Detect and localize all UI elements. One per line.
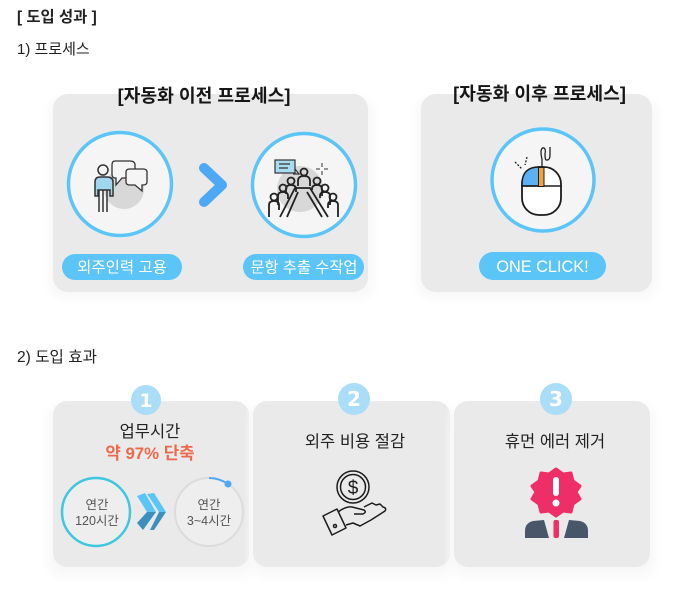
circle: annual 3-4 hours xyxy=(175,478,243,546)
panel: before automation xyxy=(48,86,374,298)
arrow: process chevron xyxy=(204,168,222,202)
panel: effect 3 human error xyxy=(450,383,656,577)
panel: effect 1 work time xyxy=(47,385,255,577)
highlight: 97 percent reduction: 약 97% 단축 xyxy=(105,444,195,463)
heading: work time: 업무시간 xyxy=(120,422,180,441)
badge 3 xyxy=(540,383,572,415)
subheading: effects: 2) 도입 효과 xyxy=(17,348,97,366)
icon: outsourced person xyxy=(68,132,172,236)
badge 1 xyxy=(131,385,161,415)
icon: coin over hand: $ xyxy=(348,478,359,499)
badge 2: 2 xyxy=(347,387,361,411)
icon: meeting room xyxy=(252,134,356,236)
icon: coin over hand xyxy=(323,471,386,535)
circle: annual 120 hours xyxy=(62,478,130,546)
panel: after automation xyxy=(416,84,658,298)
label pill: manual extraction xyxy=(243,254,364,280)
section heading: [ 도입 성과 ] xyxy=(17,8,97,26)
subheading: process: 1) 프로세스 xyxy=(17,41,90,58)
badge 2 xyxy=(338,383,370,415)
label pill: manual extraction: 문항 추출 수작업 xyxy=(250,260,358,276)
label pill: one click xyxy=(479,252,606,280)
panel title: before: [자동화 이전 프로세스] xyxy=(118,86,290,106)
icon: mouse click xyxy=(492,129,594,231)
label pill: outsourcing xyxy=(62,254,182,280)
badge 3: 3 xyxy=(549,387,563,411)
icon: error person xyxy=(525,469,588,538)
circle: annual 120 hours: 120시간 xyxy=(75,514,119,528)
heading: cost saving: 외주 비용 절감 xyxy=(305,432,405,451)
label pill: outsourcing: 외주인력 고용 xyxy=(77,258,167,276)
panel title: after: [자동화 이후 프로세스] xyxy=(453,84,626,104)
badge 1: 1 xyxy=(139,390,153,412)
panel: effect 2 cost saving xyxy=(250,383,455,577)
heading: human error removal: 휴먼 에러 제거 xyxy=(505,432,605,451)
arrow: double chevron xyxy=(137,493,166,530)
circle: annual 3-4 hours: 연간 xyxy=(197,498,221,512)
label pill: one click: ONE CLICK! xyxy=(496,258,589,276)
circle: annual 3-4 hours: 3~4시간 xyxy=(187,514,232,528)
circle: annual 120 hours: 연간 xyxy=(85,498,109,512)
